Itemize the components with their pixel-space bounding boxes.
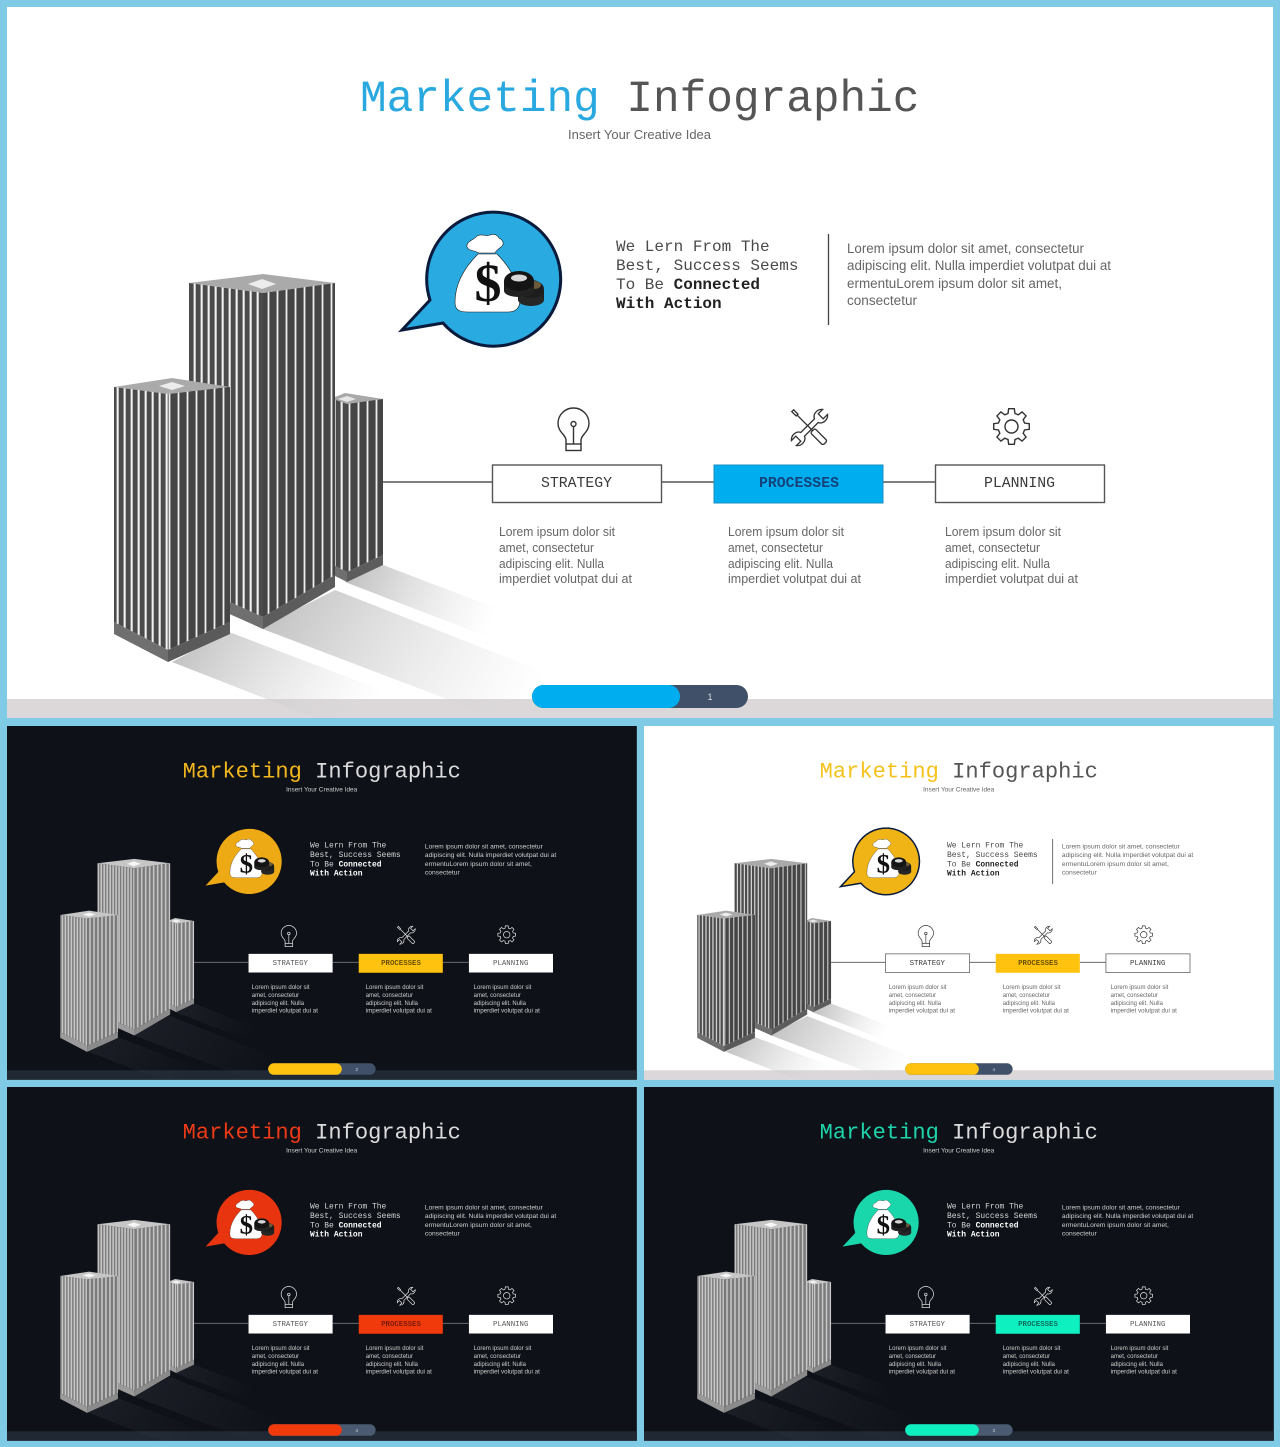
slide background bbox=[644, 1087, 1274, 1441]
text: strategy: Lorem ipsum dolor sit bbox=[889, 1345, 947, 1352]
text: strategy: imperdiet volutpat dui at bbox=[889, 1369, 955, 1376]
floor band bbox=[7, 699, 1273, 718]
speech bubble with money bag icon: $ bbox=[474, 253, 502, 313]
text: processes: adipiscing elit. Nulla bbox=[366, 1361, 418, 1368]
text: processes: Lorem ipsum dolor sit bbox=[1003, 984, 1061, 991]
box: strategy bbox=[886, 954, 970, 973]
box: planning: PLANNING bbox=[1130, 1321, 1165, 1329]
page pill bbox=[905, 1424, 1013, 1436]
page pill: 4 bbox=[355, 1428, 358, 1433]
text: strategy: imperdiet volutpat dui at bbox=[252, 1008, 318, 1015]
icon: light bulb bbox=[281, 925, 297, 947]
buildings illustration bbox=[60, 1220, 194, 1413]
text: strategy: adipiscing elit. Nulla bbox=[889, 1361, 942, 1368]
text: strategy bbox=[889, 1345, 955, 1376]
slide background bbox=[644, 726, 1274, 1080]
headline: With Action bbox=[616, 295, 722, 313]
headline: To Be Connected bbox=[616, 276, 760, 294]
headline: We Lern From The bbox=[616, 238, 770, 256]
box: processes: PROCESSES bbox=[1018, 960, 1058, 968]
intro paragraph: consectetur bbox=[1062, 869, 1097, 876]
intro paragraph: adipiscing elit. Nulla imperdiet volutpat dui at bbox=[425, 852, 556, 859]
building shadows bbox=[89, 1004, 322, 1080]
box: planning: PLANNING bbox=[493, 960, 528, 968]
headline: To Be Connected bbox=[310, 860, 382, 869]
subtitle: Insert Your Creative Idea bbox=[923, 1148, 995, 1155]
text: processes: imperdiet volutpat dui at bbox=[1003, 1369, 1069, 1376]
text: planning: Lorem ipsum dolor sit bbox=[1111, 984, 1169, 991]
icon: light bulb bbox=[558, 408, 589, 450]
text: processes: amet, consectetur bbox=[366, 992, 413, 999]
connector line bbox=[831, 961, 1106, 963]
slide background bbox=[7, 1087, 637, 1441]
box: planning bbox=[1106, 1315, 1190, 1334]
divider bbox=[828, 234, 830, 325]
text: planning: amet, consectetur bbox=[474, 992, 521, 999]
intro paragraph: adipiscing elit. Nulla imperdiet volutpat dui at bbox=[1062, 1213, 1193, 1220]
text: planning: imperdiet volutpat dui at bbox=[474, 1369, 540, 1376]
floor band bbox=[7, 1431, 637, 1441]
icon: tools bbox=[396, 1286, 416, 1306]
intro paragraph: ermentuLorem ipsum dolor sit amet, bbox=[425, 1222, 532, 1229]
headline: Best, Success Seems bbox=[310, 851, 401, 860]
headline: With Action bbox=[310, 870, 363, 879]
title: Marketing Infographic bbox=[183, 760, 461, 785]
text: processes bbox=[1003, 984, 1069, 1015]
text: planning: amet, consectetur bbox=[1111, 992, 1158, 999]
text: processes: adipiscing elit. Nulla bbox=[1003, 1000, 1055, 1007]
text: planning bbox=[474, 1345, 540, 1376]
text: processes: Lorem ipsum dolor sit bbox=[1003, 1345, 1061, 1352]
text: strategy: adipiscing elit. Nulla bbox=[499, 557, 604, 571]
box: processes: PROCESSES bbox=[1018, 1321, 1058, 1329]
intro paragraph: ermentuLorem ipsum dolor sit amet, bbox=[1062, 1222, 1169, 1229]
divider bbox=[1052, 839, 1054, 884]
headline: Best, Success Seems bbox=[310, 1212, 401, 1221]
text: planning bbox=[1111, 984, 1177, 1015]
text: planning: Lorem ipsum dolor sit bbox=[474, 1345, 532, 1352]
text: strategy: adipiscing elit. Nulla bbox=[252, 1000, 305, 1007]
intro paragraph: Lorem ipsum dolor sit amet, consectetur bbox=[425, 843, 544, 850]
buildings illustration bbox=[697, 1220, 831, 1413]
box: strategy: STRATEGY bbox=[541, 476, 612, 492]
headline: We Lern From The bbox=[947, 841, 1024, 850]
speech bubble with money bag icon: $ bbox=[877, 1209, 890, 1239]
building shadows bbox=[726, 1004, 959, 1080]
text: strategy: Lorem ipsum dolor sit bbox=[889, 984, 947, 991]
building shadows bbox=[726, 1365, 959, 1441]
floor band bbox=[644, 1070, 1274, 1080]
text: planning: adipiscing elit. Nulla bbox=[474, 1000, 526, 1007]
text: strategy: adipiscing elit. Nulla bbox=[889, 1000, 942, 1007]
text: processes: adipiscing elit. Nulla bbox=[1003, 1361, 1055, 1368]
text: strategy bbox=[889, 984, 955, 1015]
headline: To Be Connected bbox=[947, 860, 1019, 869]
intro paragraph: Lorem ipsum dolor sit amet, consectetur bbox=[425, 1204, 544, 1211]
intro paragraph bbox=[425, 1204, 556, 1237]
text: planning: imperdiet volutpat dui at bbox=[1111, 1369, 1177, 1376]
floor band bbox=[644, 1431, 1274, 1441]
speech bubble with money bag icon bbox=[402, 212, 561, 346]
intro paragraph: ermentuLorem ipsum dolor sit amet, bbox=[1062, 861, 1169, 868]
text: strategy: amet, consectetur bbox=[252, 992, 299, 999]
icon: light bulb bbox=[918, 925, 934, 947]
text: planning: Lorem ipsum dolor sit bbox=[945, 525, 1062, 539]
panel: yellow light slide bbox=[644, 726, 1274, 1080]
text: strategy bbox=[252, 984, 318, 1015]
connector line bbox=[383, 481, 935, 483]
intro paragraph: consectetur bbox=[425, 1230, 460, 1237]
icon: tools bbox=[1033, 1286, 1053, 1306]
speech bubble with money bag icon bbox=[204, 828, 282, 895]
headline: To Be Connected bbox=[947, 1221, 1019, 1230]
box: strategy: STRATEGY bbox=[273, 1321, 309, 1329]
subtitle: Insert Your Creative Idea bbox=[286, 787, 358, 794]
icon: gear bbox=[498, 1287, 516, 1305]
headline: With Action bbox=[310, 1231, 363, 1240]
speech bubble with money bag icon bbox=[204, 1189, 282, 1256]
text: planning: Lorem ipsum dolor sit bbox=[1111, 1345, 1169, 1352]
buildings illustration bbox=[114, 274, 383, 662]
box: strategy: STRATEGY bbox=[910, 960, 946, 968]
building shadows bbox=[89, 1365, 322, 1441]
intro paragraph: consectetur bbox=[425, 869, 460, 876]
title: Marketing Infographic bbox=[183, 1121, 461, 1146]
text: planning: adipiscing elit. Nulla bbox=[1111, 1361, 1163, 1368]
intro paragraph: ermentuLorem ipsum dolor sit amet, bbox=[425, 861, 532, 868]
panel: teal dark slide bbox=[644, 1087, 1274, 1441]
box: strategy bbox=[886, 1315, 970, 1334]
speech bubble with money bag icon bbox=[841, 828, 919, 895]
text: processes: amet, consectetur bbox=[728, 541, 823, 555]
text: processes: amet, consectetur bbox=[1003, 992, 1050, 999]
box: strategy bbox=[249, 954, 333, 973]
box: processes bbox=[996, 1315, 1080, 1334]
text: planning: adipiscing elit. Nulla bbox=[1111, 1000, 1163, 1007]
page pill: 3 bbox=[992, 1428, 995, 1433]
intro paragraph: Lorem ipsum dolor sit amet, consectetur bbox=[1062, 843, 1181, 850]
text: processes: Lorem ipsum dolor sit bbox=[728, 525, 845, 539]
headline: We Lern From The bbox=[310, 841, 387, 850]
title: Marketing Infographic bbox=[360, 75, 919, 125]
text: planning: amet, consectetur bbox=[1111, 1353, 1158, 1360]
intro paragraph bbox=[1062, 1204, 1193, 1237]
box: planning: PLANNING bbox=[984, 476, 1055, 492]
text: processes: Lorem ipsum dolor sit bbox=[366, 1345, 424, 1352]
page pill bbox=[268, 1424, 376, 1436]
icon: light bulb bbox=[281, 1286, 297, 1308]
text: strategy: amet, consectetur bbox=[252, 1353, 299, 1360]
box: processes: PROCESSES bbox=[759, 476, 839, 492]
icon: gear bbox=[994, 409, 1029, 444]
text: planning bbox=[945, 525, 1079, 586]
page pill: 1 bbox=[707, 692, 713, 702]
connector line bbox=[194, 1322, 469, 1324]
box: planning bbox=[469, 954, 553, 973]
text: planning: Lorem ipsum dolor sit bbox=[474, 984, 532, 991]
box: processes bbox=[359, 954, 443, 973]
box: processes: PROCESSES bbox=[381, 1321, 421, 1329]
panel: red dark slide bbox=[7, 1087, 637, 1441]
panel: main blue light slide bbox=[7, 7, 1273, 718]
buildings illustration bbox=[697, 859, 831, 1052]
box: strategy bbox=[249, 1315, 333, 1334]
title: Marketing Infographic bbox=[820, 760, 1098, 785]
box: processes bbox=[714, 465, 883, 503]
intro paragraph: ermentuLorem ipsum dolor sit amet, bbox=[847, 276, 1062, 291]
intro paragraph: adipiscing elit. Nulla imperdiet volutpat dui at bbox=[425, 1213, 556, 1220]
text: strategy: imperdiet volutpat dui at bbox=[889, 1008, 955, 1015]
intro paragraph: consectetur bbox=[1062, 1230, 1097, 1237]
box: planning: PLANNING bbox=[1130, 960, 1165, 968]
icon: tools bbox=[1033, 925, 1053, 945]
speech bubble with money bag icon: $ bbox=[240, 848, 253, 878]
intro paragraph: adipiscing elit. Nulla imperdiet volutpat dui at bbox=[847, 258, 1111, 273]
text: planning: amet, consectetur bbox=[474, 1353, 521, 1360]
headline: Best, Success Seems bbox=[616, 257, 798, 275]
icon: tools bbox=[396, 925, 416, 945]
icon: gear bbox=[498, 926, 516, 944]
page pill: 2 bbox=[355, 1067, 358, 1072]
text: planning: imperdiet volutpat dui at bbox=[474, 1008, 540, 1015]
box: planning bbox=[469, 1315, 553, 1334]
text: strategy bbox=[252, 1345, 318, 1376]
text: strategy: imperdiet volutpat dui at bbox=[252, 1369, 318, 1376]
text: processes bbox=[366, 984, 432, 1015]
intro paragraph: Lorem ipsum dolor sit amet, consectetur bbox=[847, 241, 1084, 256]
headline: We Lern From The bbox=[310, 1202, 387, 1211]
speech bubble with money bag icon: $ bbox=[877, 848, 890, 878]
text: planning: amet, consectetur bbox=[945, 541, 1040, 555]
text: strategy: imperdiet volutpat dui at bbox=[499, 572, 633, 586]
subtitle: Insert Your Creative Idea bbox=[286, 1148, 358, 1155]
intro paragraph: adipiscing elit. Nulla imperdiet volutpat dui at bbox=[1062, 852, 1193, 859]
headline: With Action bbox=[947, 1231, 1000, 1240]
text: processes: amet, consectetur bbox=[1003, 1353, 1050, 1360]
box: planning bbox=[936, 465, 1104, 502]
speech bubble with money bag icon bbox=[841, 1189, 919, 1256]
text: processes: imperdiet volutpat dui at bbox=[366, 1008, 432, 1015]
box: strategy bbox=[492, 465, 662, 502]
text: planning: adipiscing elit. Nulla bbox=[945, 557, 1050, 571]
text: strategy bbox=[499, 525, 633, 586]
box: processes bbox=[359, 1315, 443, 1334]
text: strategy: Lorem ipsum dolor sit bbox=[252, 1345, 310, 1352]
text: planning bbox=[1111, 1345, 1177, 1376]
headline: With Action bbox=[947, 870, 1000, 879]
connector line bbox=[831, 1322, 1106, 1324]
icon: light bulb bbox=[918, 1286, 934, 1308]
connector line bbox=[194, 961, 469, 963]
speech bubble with money bag icon: $ bbox=[240, 1209, 253, 1239]
text: processes: adipiscing elit. Nulla bbox=[728, 557, 833, 571]
text: processes: Lorem ipsum dolor sit bbox=[366, 984, 424, 991]
text: planning bbox=[474, 984, 540, 1015]
text: processes bbox=[728, 525, 862, 586]
box: strategy: STRATEGY bbox=[273, 960, 309, 968]
text: strategy: amet, consectetur bbox=[889, 1353, 936, 1360]
text: strategy: Lorem ipsum dolor sit bbox=[252, 984, 310, 991]
subtitle: Insert Your Creative Idea bbox=[568, 127, 712, 142]
intro paragraph bbox=[1062, 843, 1193, 876]
page pill bbox=[268, 1063, 376, 1075]
intro paragraph: consectetur bbox=[847, 293, 917, 308]
icon: gear bbox=[1135, 1287, 1153, 1305]
title: Marketing Infographic bbox=[820, 1121, 1098, 1146]
text: processes: adipiscing elit. Nulla bbox=[366, 1000, 418, 1007]
box: strategy: STRATEGY bbox=[910, 1321, 946, 1329]
intro paragraph bbox=[425, 843, 556, 876]
text: strategy: amet, consectetur bbox=[889, 992, 936, 999]
headline: Best, Success Seems bbox=[947, 1212, 1038, 1221]
box: processes bbox=[996, 954, 1080, 973]
text: processes: amet, consectetur bbox=[366, 1353, 413, 1360]
box: planning: PLANNING bbox=[493, 1321, 528, 1329]
headline: To Be Connected bbox=[310, 1221, 382, 1230]
page pill bbox=[905, 1063, 1013, 1075]
icon: tools bbox=[789, 407, 830, 448]
intro paragraph bbox=[847, 241, 1111, 308]
page pill bbox=[532, 685, 748, 708]
text: processes: imperdiet volutpat dui at bbox=[728, 572, 862, 586]
text: strategy: amet, consectetur bbox=[499, 541, 594, 555]
text: processes: imperdiet volutpat dui at bbox=[366, 1369, 432, 1376]
buildings illustration bbox=[60, 859, 194, 1052]
page pill: 4 bbox=[992, 1067, 995, 1072]
text: planning: adipiscing elit. Nulla bbox=[474, 1361, 526, 1368]
text: planning: imperdiet volutpat dui at bbox=[945, 572, 1079, 586]
box: processes: PROCESSES bbox=[381, 960, 421, 968]
text: planning: imperdiet volutpat dui at bbox=[1111, 1008, 1177, 1015]
box: planning bbox=[1106, 954, 1190, 973]
intro paragraph: Lorem ipsum dolor sit amet, consectetur bbox=[1062, 1204, 1181, 1211]
text: strategy: Lorem ipsum dolor sit bbox=[499, 525, 616, 539]
slide background bbox=[7, 726, 637, 1080]
text: processes bbox=[366, 1345, 432, 1376]
text: processes: imperdiet volutpat dui at bbox=[1003, 1008, 1069, 1015]
panel: yellow dark slide bbox=[7, 726, 637, 1080]
floor band bbox=[7, 1070, 637, 1080]
text: strategy: adipiscing elit. Nulla bbox=[252, 1361, 305, 1368]
icon: gear bbox=[1135, 926, 1153, 944]
headline: We Lern From The bbox=[947, 1202, 1024, 1211]
text: processes bbox=[1003, 1345, 1069, 1376]
building shadows bbox=[172, 565, 640, 718]
headline: Best, Success Seems bbox=[947, 851, 1038, 860]
subtitle: Insert Your Creative Idea bbox=[923, 787, 995, 794]
slide background bbox=[7, 7, 1273, 718]
